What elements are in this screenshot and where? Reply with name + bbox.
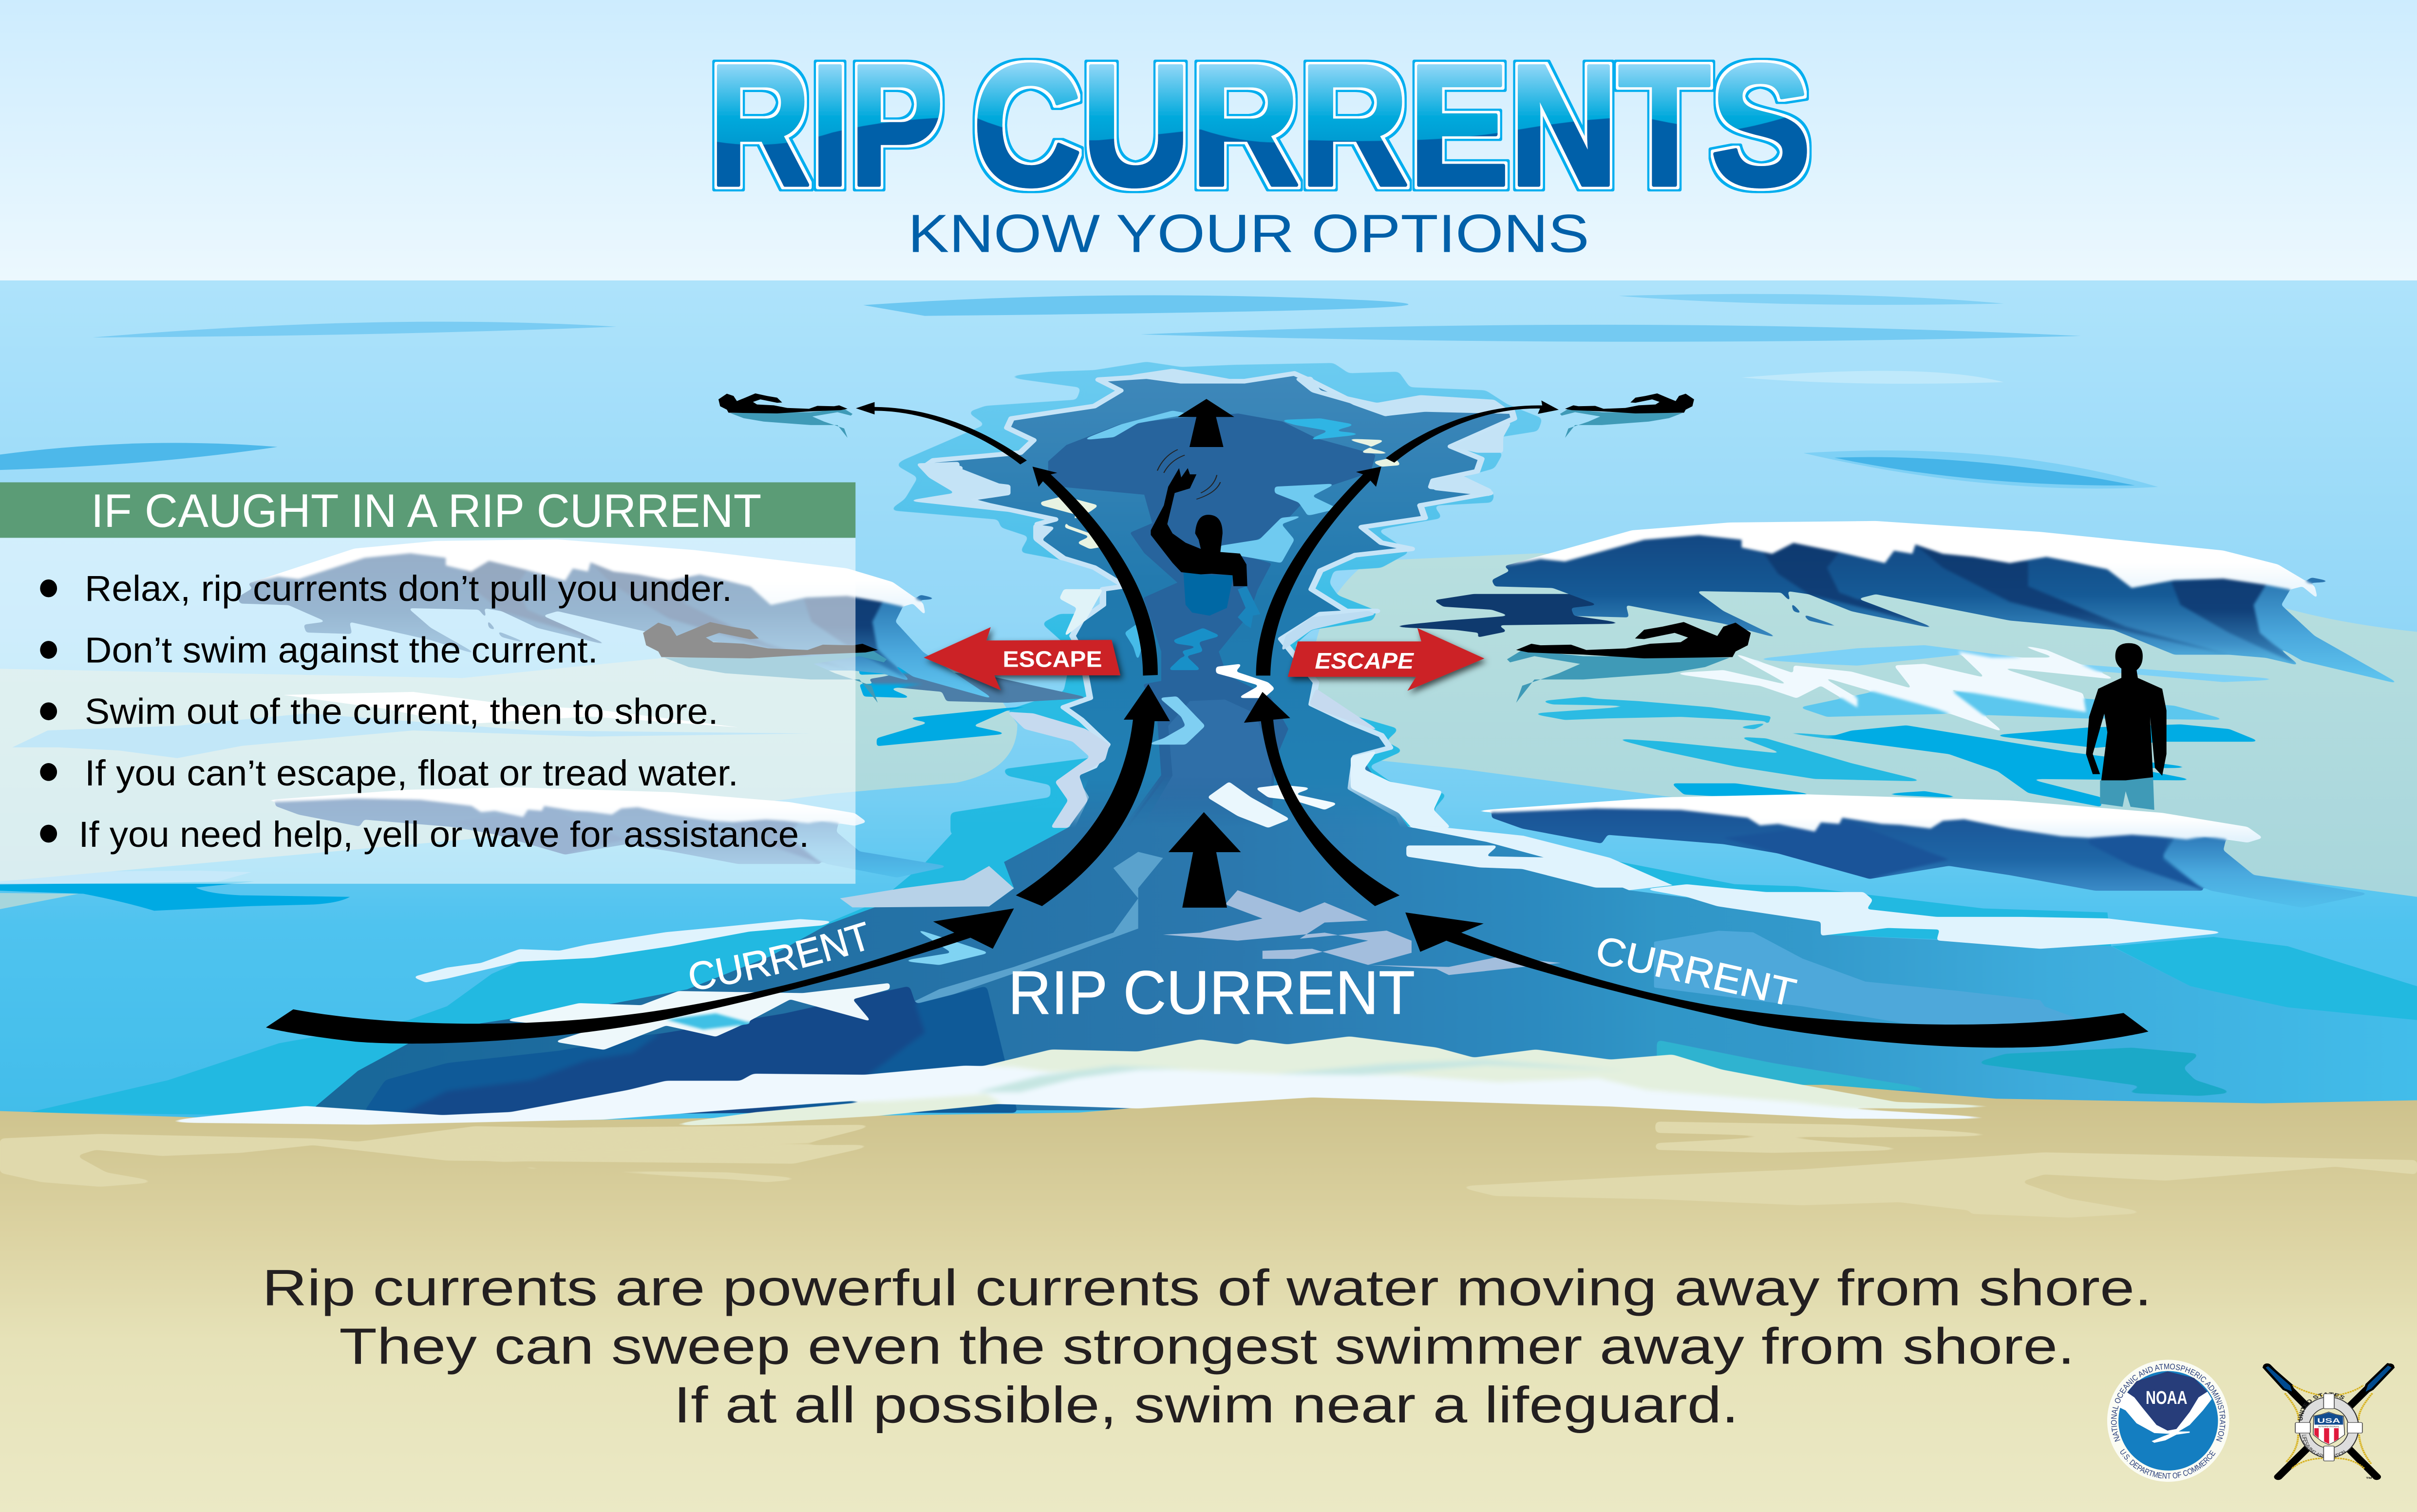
bottom description: Rip currents are powerful currents of water moving away from shore. <box>262 1259 2152 1316</box>
logo: NOAA <box>2107 1360 2229 1482</box>
cyan nearshore water right <box>2112 937 2417 1020</box>
distant water streaks <box>0 294 2158 911</box>
shoreline foam <box>151 1037 2052 1126</box>
standing person silhouette <box>2086 643 2167 810</box>
teal shallow patch <box>1657 1040 2233 1096</box>
bottom description: If at all possible, swim near a lifeguard. <box>674 1377 1739 1434</box>
label: current left: CURRENT <box>690 921 866 989</box>
label: rip current: RIP CURRENT <box>1008 958 1415 1027</box>
logo: NOAA: NOAA <box>2146 1388 2187 1408</box>
lower right breaking wave <box>1464 794 2369 908</box>
escape arrow right <box>1288 628 1484 691</box>
tips list: If you need help, yell or wave for assistance. <box>78 814 809 855</box>
logo: United States Lifesaving Association: TM <box>2366 1477 2372 1480</box>
lower left breaking wave <box>254 787 948 877</box>
neck dark water fading into funnel <box>927 373 1514 835</box>
logo: NOAA: U.S. DEPARTMENT OF COMMERCE <box>2120 1449 2215 1479</box>
arrow: left feeder into neck <box>1016 684 1170 906</box>
sandbar left <box>0 647 1018 881</box>
tips list: Relax, rip currents don’t pull you under. <box>85 568 732 609</box>
tips list: If you can’t escape, float or tread water. <box>85 753 738 793</box>
tips list: Don’t swim against the current. <box>85 630 598 671</box>
sandbar right <box>1310 553 2417 897</box>
bottom description <box>262 1259 2152 1434</box>
arrow: center up top <box>1178 399 1234 447</box>
arrow: left neck outward <box>1033 467 1158 675</box>
swimmer: top right escaping <box>1560 393 1694 438</box>
swimmer: right large <box>1507 622 1751 703</box>
arrow: top left curve to swimmer <box>856 402 1027 465</box>
escape arrow left: ESCAPE <box>1003 647 1102 672</box>
panel header bar <box>0 482 855 538</box>
arrow: right neck outward <box>1256 467 1381 675</box>
title: CURRENTS <box>973 29 1811 222</box>
bottom description: They can sweep even the strongest swimmer away from shore. <box>339 1318 2075 1375</box>
tips list: Swim out of the current, then to shore. <box>85 691 718 732</box>
upper left breaking wave <box>238 540 994 699</box>
sky background <box>0 0 2417 282</box>
escape arrow left <box>924 627 1120 690</box>
logo: NOAA: NATIONAL OCEANIC AND ATMOSPHERIC ADMINISTRATION <box>2111 1363 2226 1442</box>
subtitle: KNOW YOUR OPTIONS <box>908 204 1589 263</box>
arrow: right feeder into neck <box>1244 692 1399 906</box>
bullets <box>40 579 57 842</box>
rip current channel: lower funnel water <box>316 747 2417 1110</box>
cyan left nearshore band <box>28 826 1079 1117</box>
waving swimmer in the rip <box>1151 449 1261 628</box>
swimmer: top left escaping <box>718 393 852 438</box>
arrow: center up lower <box>1169 812 1241 908</box>
logo: United States Lifesaving Association: USA <box>2317 1417 2340 1425</box>
title: RIP <box>709 29 944 222</box>
panel: if caught in a rip current <box>0 482 855 884</box>
title <box>709 29 1811 222</box>
right surf foam and cyan swirls <box>1388 594 2284 949</box>
logo: United States Lifesaving Association: INTERNATIONAL <box>2318 1426 2340 1428</box>
logo: United States Lifesaving Association: UNITED STATES <box>2298 1392 2345 1420</box>
tips list <box>78 568 809 855</box>
swimmer: ghost behind panel <box>643 622 887 703</box>
arrow: top right curve to swimmer <box>1386 400 1559 463</box>
rip current channel: ring around the neck <box>890 362 1542 835</box>
upper right breaking wave <box>1492 521 2400 684</box>
logo: United States Lifesaving Association: LIFESAVING ASSOCIATION <box>2301 1435 2348 1459</box>
lighter patch near right current <box>1656 933 2073 1025</box>
ocean water <box>0 280 2417 1128</box>
label: current right: CURRENT <box>1598 938 1797 1005</box>
arrows: neck and outward flow <box>856 399 1559 675</box>
arrow: right longshore current <box>1405 913 2149 1047</box>
escape arrow right: ESCAPE <box>1315 648 1414 673</box>
arrow: left longshore current <box>266 908 1014 1044</box>
sandbar left surf streaks <box>12 692 809 758</box>
logo: United States Lifesaving Association <box>2264 1364 2393 1480</box>
panel translucent body <box>0 538 855 884</box>
darker shades in left funnel <box>364 986 1018 1116</box>
beach sand <box>0 1085 2417 1512</box>
sand ripples <box>0 1122 2417 1217</box>
left current foam <box>413 919 989 1050</box>
neck eddies and pale foam <box>859 369 1514 828</box>
panel heading: IF CAUGHT IN A RIP CURRENT <box>91 485 761 537</box>
